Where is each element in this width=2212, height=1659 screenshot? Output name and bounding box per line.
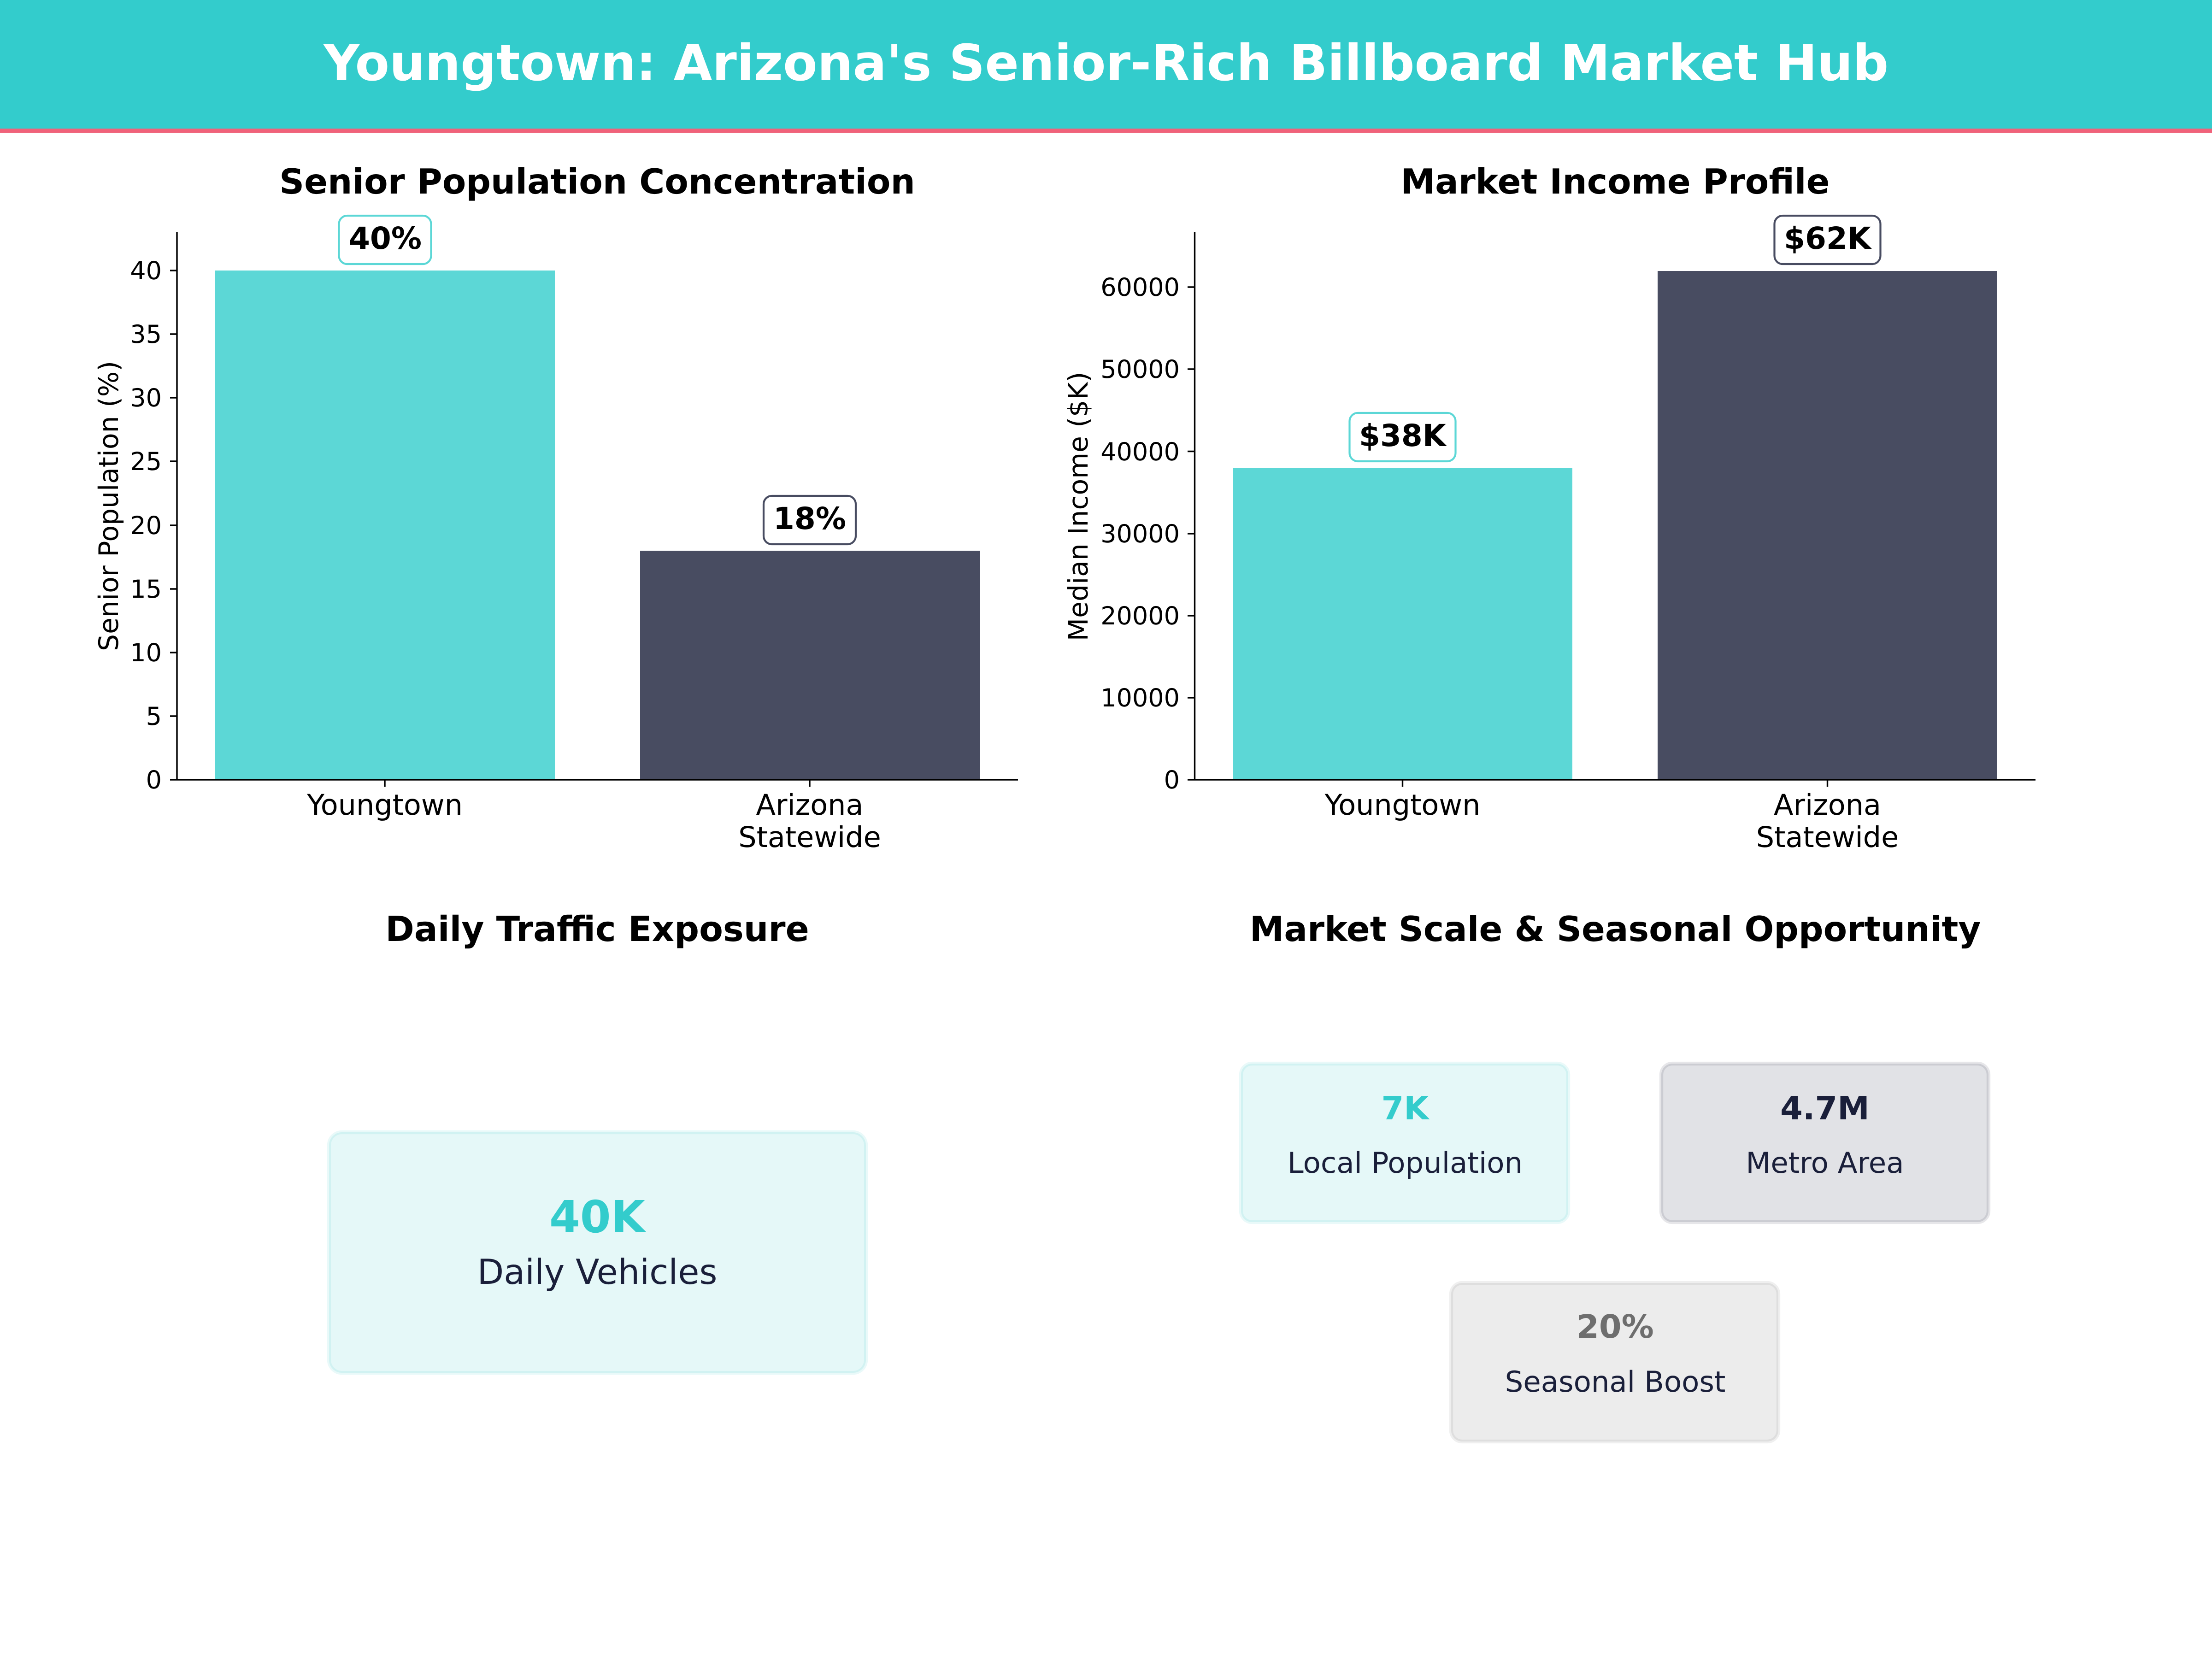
y axis with ticks: 35: [130, 320, 162, 349]
y axis with ticks: [1100, 232, 2036, 794]
card: metro area: Metro Area: [1746, 1146, 1904, 1180]
y axis with ticks: 30: [130, 383, 162, 412]
x axis labels: Youngtown: [1324, 788, 1480, 822]
panel: market income chart: [1063, 161, 2036, 854]
card: seasonal boost: Seasonal Boost: [1505, 1365, 1725, 1399]
bar: Youngtown 40%: [215, 271, 555, 780]
x axis labels: Statewide: [1756, 820, 1899, 854]
x axis labels: Statewide: [738, 820, 881, 854]
x axis labels: Arizona: [1774, 788, 1881, 822]
x axis labels: [1324, 780, 1899, 854]
y axis with ticks: 40000: [1100, 437, 1180, 466]
y axis with ticks: 50000: [1100, 355, 1180, 384]
y axis with ticks: 0: [1164, 765, 1180, 794]
card: metro area: 4.7M: [1780, 1089, 1870, 1127]
y axis with ticks: 60000: [1100, 273, 1180, 302]
card: local population: [1241, 1064, 1568, 1222]
y axis with ticks: 5: [146, 702, 162, 731]
card: seasonal boost: [1451, 1283, 1778, 1441]
y axis with ticks: 25: [130, 447, 162, 476]
card: daily vehicles: [329, 1132, 866, 1373]
value label: $62K: [1774, 216, 1880, 264]
card: daily vehicles: Daily Vehicles: [477, 1252, 717, 1292]
y axis with ticks: 40: [130, 256, 162, 285]
card: local population: Local Population: [1288, 1146, 1523, 1180]
y axis with ticks: [130, 232, 1018, 794]
y axis with ticks: 20000: [1100, 601, 1180, 630]
heading: market scale: Market Scale & Seasonal Opportunity: [1250, 909, 1981, 949]
x axis labels: Youngtown: [306, 788, 463, 822]
value label: 18%: 18%: [773, 501, 846, 536]
title: Youngtown: Arizona's Senior-Rich Billboard Market Hub: [323, 34, 1888, 92]
y axis with ticks: 0: [146, 765, 162, 794]
y axis label: Senior Population (%): [93, 361, 124, 651]
value label: 40%: [339, 216, 431, 264]
value label: $38K: $38K: [1359, 418, 1447, 453]
bar: Arizona Statewide 18%: [640, 551, 980, 780]
bar: Arizona Statewide $62K: [1658, 271, 1997, 780]
y axis with ticks: 15: [130, 575, 162, 604]
y axis label: Median Income ($K): [1063, 372, 1094, 641]
panel: daily traffic: [329, 909, 866, 1373]
heading: daily traffic: Daily Traffic Exposure: [385, 909, 809, 949]
card: daily vehicles: 40K: [549, 1191, 647, 1243]
panel: market scale and seasonal opportunity: [1241, 909, 1988, 1441]
card: local population: 7K: [1382, 1089, 1430, 1127]
y axis with ticks: 10000: [1100, 683, 1180, 712]
x axis labels: Arizona: [756, 788, 863, 822]
value label: 40%: 40%: [349, 221, 422, 256]
value label: $38K: [1349, 413, 1455, 461]
header banner: [0, 0, 2212, 133]
y axis with ticks: 10: [130, 638, 162, 667]
panel: senior population chart: [93, 161, 1018, 854]
y axis with ticks: 20: [130, 511, 162, 540]
value label: $62K: $62K: [1784, 221, 1872, 256]
bar: Youngtown $38K: [1233, 468, 1572, 780]
value label: 18%: [764, 496, 856, 544]
heading: market income: Market Income Profile: [1401, 161, 1830, 202]
x axis labels: [306, 780, 881, 854]
y axis with ticks: 30000: [1100, 519, 1180, 548]
heading: senior population: Senior Population Concentration: [279, 161, 915, 202]
card: metro area: [1661, 1064, 1988, 1222]
card: seasonal boost: 20%: [1577, 1308, 1654, 1346]
